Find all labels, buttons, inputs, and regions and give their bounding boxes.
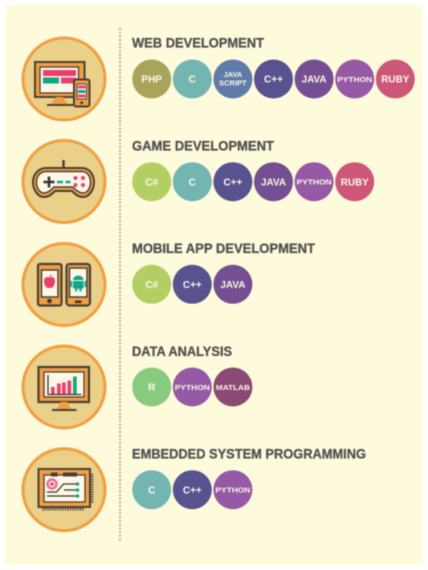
language badges: PYTHON bbox=[297, 178, 332, 186]
icon: monitor with bar chart bbox=[23, 346, 105, 428]
heading: WEB DEVELOPMENT bbox=[132, 36, 265, 50]
language badges: JAVA bbox=[220, 280, 245, 291]
language badges: C bbox=[148, 485, 155, 496]
section: game development bbox=[23, 138, 374, 222]
language badges: SCRIPT bbox=[219, 78, 247, 87]
language badges: C++ bbox=[183, 280, 202, 291]
icon: circuit board chip bbox=[23, 449, 105, 531]
language badges: RUBY bbox=[341, 177, 369, 188]
language badges: JAVA bbox=[223, 70, 243, 79]
language badges: R bbox=[148, 383, 156, 394]
dotted divider bbox=[119, 28, 121, 542]
language badges: MATLAB bbox=[216, 383, 251, 392]
language badges: C bbox=[189, 177, 196, 188]
language badges: C++ bbox=[264, 75, 283, 86]
language badges: C++ bbox=[223, 177, 243, 188]
language badges: C++ bbox=[183, 485, 202, 496]
icon: game controller bbox=[23, 140, 105, 222]
icon: two smartphones bbox=[23, 244, 105, 326]
icon: android logo bbox=[70, 276, 86, 292]
language badges: RUBY bbox=[381, 75, 410, 86]
heading: EMBEDDED SYSTEM PROGRAMMING bbox=[132, 446, 366, 462]
language badges: C# bbox=[145, 177, 159, 188]
language badges: JAVA bbox=[302, 75, 327, 86]
language badges: PYTHON bbox=[337, 75, 372, 84]
language badges: PHP bbox=[141, 75, 162, 86]
language badges bbox=[132, 368, 252, 406]
heading: MOBILE APP DEVELOPMENT bbox=[132, 241, 316, 256]
language badges bbox=[132, 162, 374, 201]
icon: apple logo bbox=[44, 274, 55, 288]
language badges: JAVA bbox=[261, 177, 286, 188]
language badges: C# bbox=[145, 280, 159, 291]
section: embedded system programming bbox=[23, 446, 366, 531]
section: web development bbox=[23, 36, 415, 120]
language badges bbox=[132, 470, 252, 509]
language badges bbox=[132, 60, 415, 98]
heading: DATA ANALYSIS bbox=[132, 344, 232, 359]
icon: monitor and phone bbox=[23, 38, 105, 120]
language badges: PYTHON bbox=[175, 383, 210, 392]
language badges: PYTHON bbox=[215, 486, 250, 494]
heading: GAME DEVELOPMENT bbox=[132, 138, 275, 154]
language badges: C bbox=[189, 75, 196, 86]
language badges bbox=[132, 265, 252, 304]
section: data analysis bbox=[23, 344, 252, 428]
section: mobile app development bbox=[23, 241, 316, 326]
